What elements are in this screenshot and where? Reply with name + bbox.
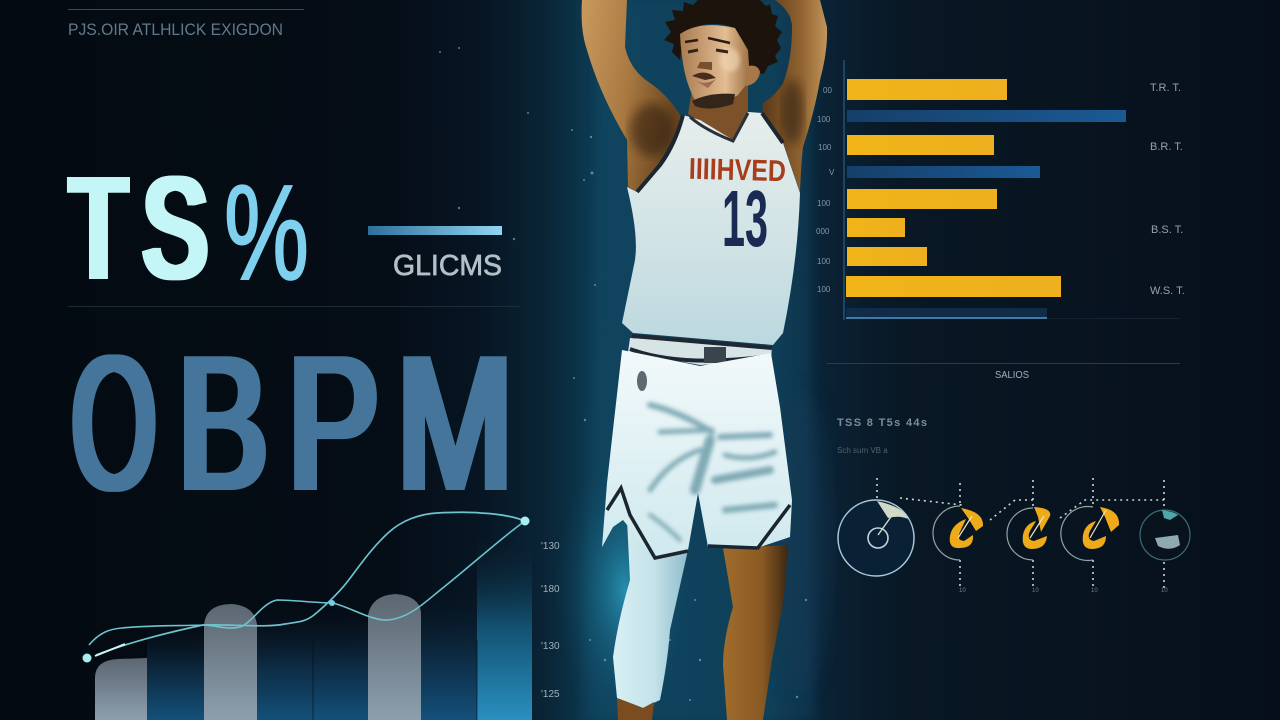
- baseline: [1047, 318, 1180, 319]
- right value labels: T.R. T.: [1150, 82, 1181, 94]
- axis labels: '130: [541, 541, 560, 552]
- gauge 5: [1140, 510, 1190, 560]
- right leg: [723, 545, 788, 720]
- dark columns: [147, 530, 532, 720]
- grey columns: [95, 594, 421, 720]
- connector dots: [877, 478, 1164, 590]
- header text: PJS.OIR ATLHLICK EXIGDON: [68, 20, 283, 39]
- line: wavy series: [89, 521, 525, 645]
- left tick labels: [816, 86, 835, 294]
- sub label: GLICMS: [393, 250, 502, 282]
- left arm shadow: [630, 104, 674, 156]
- shorts folds: [650, 405, 775, 540]
- shorts: [602, 350, 792, 558]
- gauges subheading: Sch sum VB a: [837, 446, 888, 455]
- gauge 4: [1061, 507, 1119, 560]
- lower left leg: [617, 698, 654, 720]
- left tick labels: 100: [817, 115, 831, 124]
- gauge 3: [1007, 507, 1050, 560]
- chart: trend columns and lines: [82, 512, 560, 720]
- line start highlight: [95, 644, 125, 656]
- heading: OBPM: M: [397, 318, 513, 530]
- heading: TS%: %: [224, 157, 309, 308]
- gauge 1: [838, 500, 914, 576]
- right value labels: B.S. T.: [1151, 224, 1183, 236]
- axis labels: '180: [541, 584, 560, 595]
- right value labels: [1150, 82, 1185, 297]
- heading: OBPM: [72, 318, 513, 530]
- axis labels: '125: [541, 689, 560, 700]
- axis labels: '130: [541, 641, 560, 652]
- particles: [439, 47, 807, 701]
- gauge labels: 10: [1091, 588, 1098, 594]
- heading: OBPM: P: [288, 318, 379, 530]
- jersey trim: [637, 113, 783, 192]
- heading: TS%: T: [70, 148, 127, 306]
- left tick labels: 100: [817, 285, 831, 294]
- line: steep series: [96, 512, 525, 655]
- left tick labels: 100: [817, 199, 831, 208]
- right arm: [762, 0, 827, 192]
- bar chart caption: SALIOS: [995, 370, 1029, 381]
- right value labels: B.R. T.: [1150, 141, 1183, 153]
- gauge labels: [959, 588, 1168, 594]
- neck: [688, 85, 748, 142]
- jersey number: 13: [722, 174, 768, 263]
- shorts trim: [607, 488, 790, 558]
- left tick labels: 000: [816, 227, 830, 236]
- jersey wordmark: IIIIHVED: [688, 153, 786, 188]
- gauge 2: [933, 506, 983, 560]
- top rule: [68, 9, 304, 10]
- shorts logo: [637, 371, 647, 391]
- gauges: [838, 478, 1190, 594]
- hair: [664, 0, 782, 74]
- heading: TS%: S: [143, 148, 207, 306]
- accent bar: [368, 226, 502, 235]
- face: [680, 25, 760, 109]
- gauge labels: 10: [1032, 588, 1039, 594]
- waistband: [628, 336, 772, 365]
- divider: [68, 306, 520, 307]
- heading: OBPM: B: [178, 318, 268, 530]
- heading: TS%: [70, 148, 309, 308]
- heading: OBPM: O: [72, 318, 156, 530]
- gauge labels: 10: [1161, 588, 1168, 594]
- right value labels: W.S. T.: [1150, 285, 1185, 297]
- bar chart: [816, 60, 1185, 320]
- left tick labels: 00: [823, 86, 832, 95]
- player: [582, 0, 827, 720]
- left tick labels: V: [829, 168, 835, 177]
- left arm: [582, 0, 682, 192]
- left tick labels: 100: [818, 143, 832, 152]
- bars: [846, 79, 1126, 319]
- left leg sleeve: [613, 520, 688, 708]
- jersey: [622, 112, 800, 345]
- right arm shadow: [782, 80, 804, 144]
- bottom rule: [827, 363, 1180, 364]
- bar chart axis: [843, 60, 845, 320]
- gauges heading: TSS 8 T5s 44s: [837, 417, 927, 429]
- axis labels: [541, 541, 560, 700]
- gauge labels: 10: [959, 588, 966, 594]
- left tick labels: 100: [817, 257, 831, 266]
- data points: [82, 516, 530, 662]
